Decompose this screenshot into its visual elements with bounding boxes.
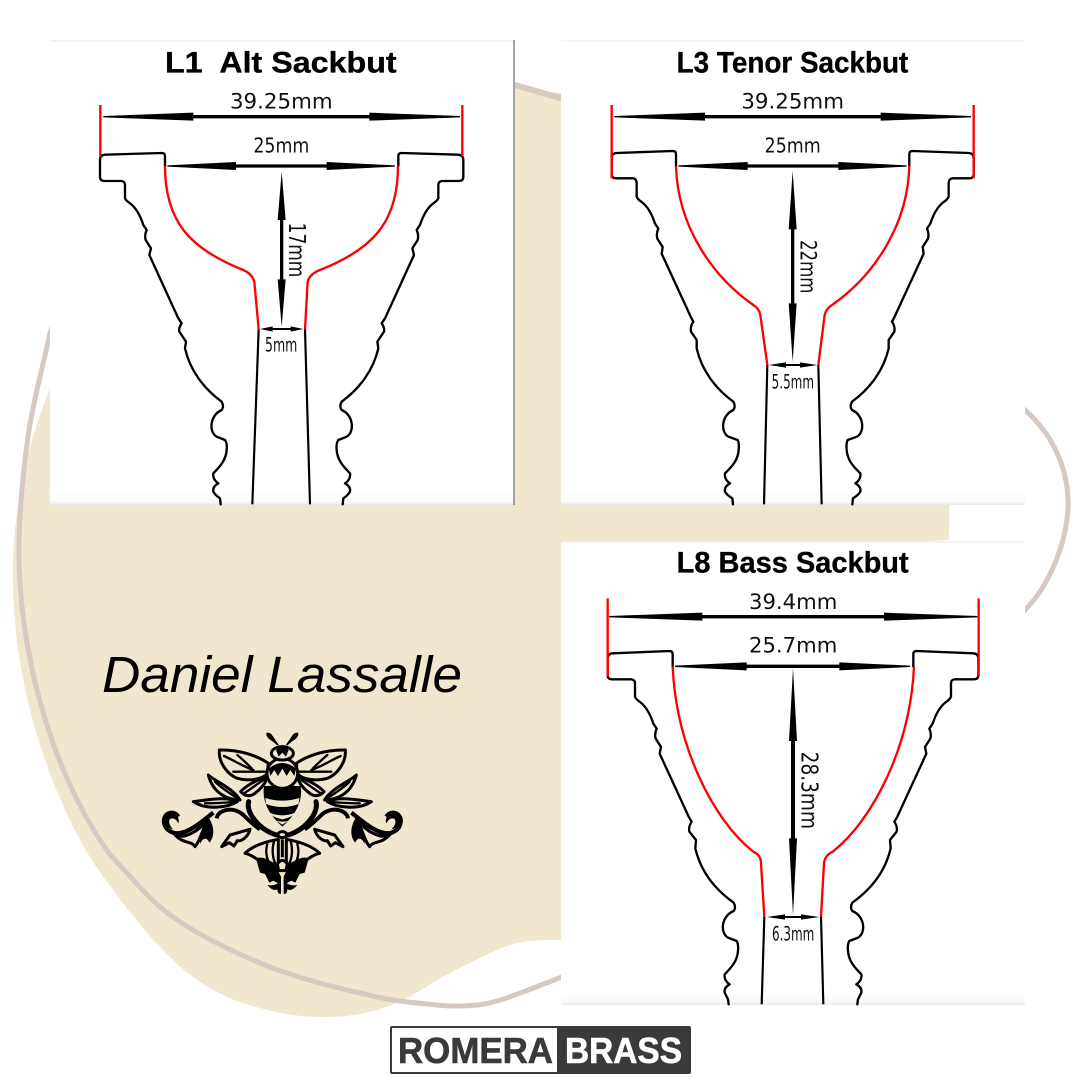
arrow: 39.25mm [614,113,971,121]
label: 25mm: 25mm [253,133,309,157]
label: 6.3mm: 6.3mm [772,922,814,945]
label: 5mm: 5mm [265,334,297,357]
arrow: 22mm [789,171,797,362]
arrow: 25mm [678,162,907,170]
label: 39.4mm: 39.4mm [749,590,837,615]
icon: bee with floral ornament [164,733,401,894]
background cream blob [13,88,950,1017]
rim width red markers [100,105,462,157]
rim width red markers [608,598,979,677]
panel: L8 Bass Sackbut [561,541,1025,1005]
arrow: 39.25mm [103,113,460,121]
label: 28.3mm: 28.3mm [795,752,823,829]
arrow: 5mm [260,326,303,332]
arrow: 25mm [167,162,395,170]
arrow: 6.3mm [767,914,819,920]
rim width red markers [612,105,974,178]
logo word: BRASS: BRASS [565,1030,682,1071]
mouthpiece profile: L3 [612,151,974,504]
title: L8 Bass Sackbut: L8 Bass Sackbut [677,546,909,579]
arrow: 28.3mm [789,668,797,915]
mouthpiece profile: L1 [100,153,463,504]
name: Daniel Lassalle: Daniel Lassalle [102,646,462,703]
arrow: 17mm [278,172,286,327]
label: 5.5mm: 5.5mm [772,370,814,393]
label: 39.25mm: 39.25mm [741,89,844,114]
arrow: 5.5mm [769,362,817,368]
logo: Romera Brass [390,1026,691,1074]
label: 39.25mm: 39.25mm [230,89,333,114]
panel: L1 Alt Sackbut [50,40,515,505]
label: 25mm: 25mm [765,133,821,157]
mouthpiece profile: L8 [608,651,978,1004]
label: 17mm: 17mm [283,223,309,277]
title: L3 Tenor Sackbut: L3 Tenor Sackbut [677,46,909,79]
label: 22mm: 22mm [795,240,820,293]
arrow: 39.4mm [609,613,977,621]
panel: L3 Tenor Sackbut [561,40,1025,505]
logo word: ROMERA: ROMERA [398,1030,553,1071]
arrow: 25.7mm [675,662,910,670]
title: L1 Alt Sackbut: L1 Alt Sackbut [165,46,397,79]
label: 25.7mm: 25.7mm [749,634,837,659]
